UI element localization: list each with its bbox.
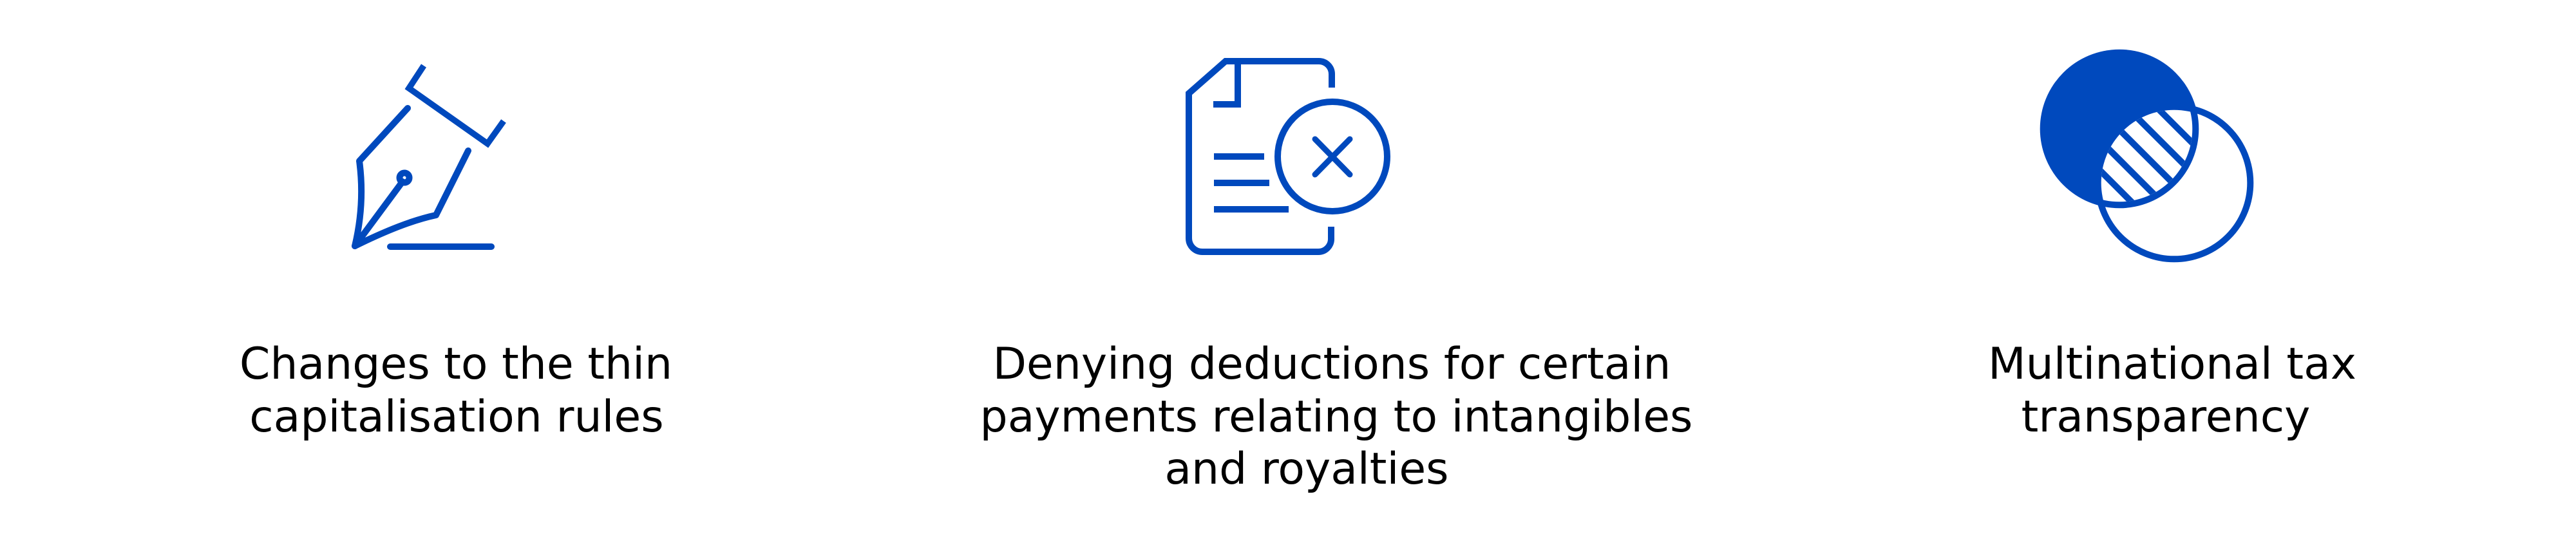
text: multinational tax transparency: transparency [2022, 392, 2310, 442]
text: changes to the thin capitalisation rules: capitalisation rules [249, 392, 664, 442]
icon: overlapping circles [2040, 49, 2254, 263]
icon: document with cross [1189, 61, 1387, 252]
text: changes to the thin capitalisation rules: Changes to the thin [240, 339, 672, 390]
text: denying deductions: and royalties [1164, 444, 1449, 495]
text: denying deductions: Denying deductions for certain [993, 339, 1671, 390]
icon: fountain pen nib [355, 66, 504, 247]
text: denying deductions: payments relating to intangibles [980, 392, 1692, 442]
text: multinational tax transparency: Multinational tax [1988, 339, 2356, 390]
